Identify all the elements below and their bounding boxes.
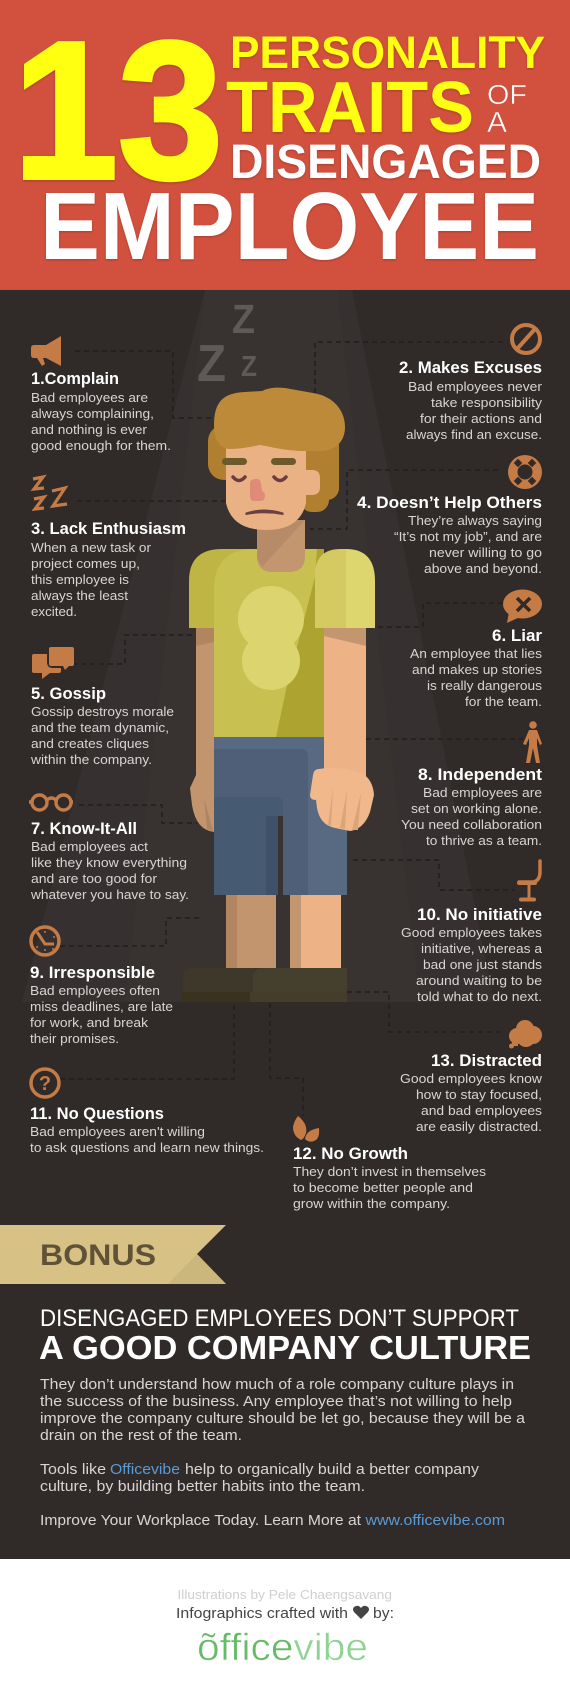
text: Gossip destroys morale <box>31 704 174 719</box>
text: this employee is <box>31 572 130 587</box>
heading: 1.Complain <box>31 370 119 388</box>
header banner <box>0 0 570 290</box>
bonus heading: DISENGAGED EMPLOYEES DON’T SUPPORT <box>40 1305 519 1332</box>
text <box>401 925 543 1004</box>
trait 8: independent <box>401 721 543 848</box>
shoes <box>181 968 347 1002</box>
back hair <box>208 425 339 512</box>
text: to ask questions and learn new things. <box>30 1140 264 1155</box>
text: Bad employees are <box>423 785 542 800</box>
text: and creates cliques <box>31 736 150 751</box>
trait 1: complain <box>31 336 171 453</box>
bonus label: BONUS <box>40 1239 156 1272</box>
bonus call to action: www.officevibe.com <box>364 1513 505 1529</box>
trait 10: no initiative <box>401 861 543 1004</box>
shirt <box>189 549 375 737</box>
text: You need collaboration <box>401 817 542 832</box>
closed eyes <box>233 477 286 480</box>
text: They don’t invest in themselves <box>293 1164 487 1179</box>
text: is really dangerous <box>427 678 543 693</box>
text: “It’s not my job”, and are <box>394 529 542 544</box>
trait 9: irresponsible <box>30 927 173 1046</box>
text: project comes up, <box>31 556 140 571</box>
heading: 7. Know-It-All <box>31 820 137 838</box>
text: Bad employees are <box>31 390 148 405</box>
heading: 8. Independent <box>418 766 543 784</box>
trait 12: no growth <box>293 1116 487 1211</box>
bonus paragraph 2: culture, by building better habits into the team. <box>40 1479 365 1495</box>
eyebrows <box>222 458 296 465</box>
chest stain <box>238 586 304 690</box>
bonus heading: A GOOD COMPANY CULTURE <box>39 1329 531 1366</box>
title: traits: TRAITS <box>226 68 474 148</box>
text: grow within the company. <box>293 1196 450 1211</box>
text: around waiting to be <box>416 973 542 988</box>
sleeping Z letters <box>197 296 257 393</box>
icon: question mark: ? <box>39 1073 51 1095</box>
text: above and beyond. <box>424 561 542 576</box>
text: and nothing is ever <box>31 422 148 437</box>
title: personality: PERSONALITY <box>230 27 545 78</box>
text: always the least <box>31 588 128 603</box>
text: and the team dynamic, <box>31 720 169 735</box>
text: miss deadlines, are late <box>30 999 173 1014</box>
icon: question mark <box>31 1069 59 1097</box>
text: whatever you have to say. <box>30 887 189 902</box>
nose <box>250 479 265 501</box>
heading: 2. Makes Excuses <box>399 359 542 377</box>
sleeping Z letters: Z <box>232 296 255 342</box>
icon: chair <box>517 861 540 902</box>
main hair <box>214 388 345 451</box>
heading: 10. No initiative <box>417 906 542 924</box>
crafted with line: by: <box>373 1606 394 1622</box>
character illustration <box>181 388 375 1002</box>
text: An employee that lies <box>410 646 543 661</box>
icon: zzz <box>33 477 67 509</box>
icon: standing person <box>523 721 542 763</box>
text: Good employees know <box>400 1071 543 1086</box>
text <box>406 379 543 442</box>
text: Bad employees never <box>408 379 543 394</box>
text: take responsibility <box>431 395 543 410</box>
text <box>401 785 542 848</box>
text: always complaining, <box>31 406 154 421</box>
bonus paragraph 1 <box>40 1377 526 1444</box>
crafted with line: Infographics crafted with <box>176 1606 348 1622</box>
heading: 12. No Growth <box>293 1145 408 1163</box>
text: Bad employees often <box>30 983 160 998</box>
text: never willing to go <box>429 545 542 560</box>
text: and are too good for <box>31 871 158 886</box>
title: a: A <box>487 107 508 139</box>
text: are easily distracted. <box>416 1119 542 1134</box>
bonus paragraph 1: drain on the rest of the team. <box>40 1428 242 1444</box>
trait 6: liar <box>410 590 543 709</box>
text: how to stay focused, <box>416 1087 542 1102</box>
footer <box>0 1559 570 1695</box>
bonus paragraph 2 <box>40 1462 480 1495</box>
icon: speech bubble with x <box>503 590 542 623</box>
heading: 3. Lack Enthusiasm <box>31 520 186 538</box>
illustrator credit: Illustrations by Pele Chaengsavang <box>178 1587 392 1602</box>
text <box>30 983 173 1046</box>
trait 11: no questions <box>30 1069 264 1155</box>
trait 3: lack enthusiasm <box>31 477 186 619</box>
text: When a new task or <box>31 540 152 555</box>
icon: glasses <box>29 795 73 810</box>
bonus ribbon <box>0 1225 226 1284</box>
title: 13: 13 <box>13 1 223 220</box>
trait 7: know-it-all <box>29 795 189 902</box>
officevibe logo: õfficevibe <box>197 1627 368 1669</box>
icon: clock <box>31 927 59 955</box>
heading: 13. Distracted <box>431 1052 542 1070</box>
title: disengaged: DISENGAGED <box>230 136 541 189</box>
icon: life ring <box>508 455 542 489</box>
bonus paragraph 1: improve the company culture should be let go, because they will be a <box>40 1411 526 1427</box>
dashed connector lines <box>60 342 523 1116</box>
mouth <box>246 510 283 514</box>
text <box>400 1071 543 1134</box>
trait 2: makes excuses <box>399 325 543 442</box>
icon: thought cloud <box>509 1020 542 1048</box>
shorts <box>214 737 347 895</box>
text: their promises. <box>30 1031 119 1046</box>
trait 4: doesn't help others <box>357 455 542 576</box>
bonus paragraph 1: the success of the business. Any employee that’s not willing to help <box>40 1394 512 1410</box>
text: Bad employees act <box>31 839 148 854</box>
sleeping Z letters: Z <box>197 335 226 393</box>
text: initiative, whereas a <box>421 941 543 956</box>
legs <box>226 895 341 968</box>
text <box>31 390 171 453</box>
text <box>31 540 152 619</box>
text: Good employees takes <box>401 925 543 940</box>
bonus paragraph 1: They don’t understand how much of a role company culture plays in <box>40 1377 514 1393</box>
text: excited. <box>31 604 77 619</box>
text: bad one just stands <box>423 957 543 972</box>
text: for the team. <box>465 694 542 709</box>
text <box>30 1124 264 1155</box>
bonus call to action: Improve Your Workplace Today. Learn More at <box>40 1513 361 1529</box>
trait 5: gossip <box>30 647 174 767</box>
text: Bad employees aren't willing <box>30 1124 205 1139</box>
title: employee: EMPLOYEE <box>40 173 539 280</box>
heading: 9. Irresponsible <box>30 964 155 982</box>
text: set on working alone. <box>411 801 542 816</box>
title: of: OF <box>487 79 527 110</box>
bonus paragraph 2: Officevibe <box>110 1462 180 1478</box>
bonus paragraph 2: Tools like <box>40 1462 106 1478</box>
heading: 6. Liar <box>492 627 543 645</box>
text <box>293 1164 487 1211</box>
text: for their actions and <box>420 411 542 426</box>
text: good enough for them. <box>31 438 171 453</box>
text <box>394 513 542 576</box>
text <box>410 646 543 709</box>
text: and bad employees <box>421 1103 543 1118</box>
icon: prohibited sign <box>512 325 540 353</box>
bonus paragraph 2: help to organically build a better company <box>185 1462 480 1478</box>
right hand <box>310 768 374 831</box>
right arm <box>324 628 366 778</box>
text: told what to do next. <box>417 989 542 1004</box>
text: and makes up stories <box>412 662 543 677</box>
text: to thrive as a team. <box>426 833 542 848</box>
text <box>30 839 189 902</box>
bonus call to action <box>40 1513 505 1529</box>
text: always find an excuse. <box>406 427 542 442</box>
text: They’re always saying <box>408 513 542 528</box>
spotlight beam <box>22 290 494 1002</box>
icon: chat bubbles <box>32 647 74 679</box>
text: to become better people and <box>293 1180 473 1195</box>
text: for work, and break <box>30 1015 149 1030</box>
icon: heart <box>353 1606 369 1619</box>
bonus heading <box>39 1305 531 1366</box>
sleeping Z letters: Z <box>241 351 257 383</box>
text: like they know everything <box>31 855 187 870</box>
text: within the company. <box>30 752 152 767</box>
neck <box>257 520 305 572</box>
left arm <box>190 628 214 832</box>
heading: 4. Doesn’t Help Others <box>357 494 542 512</box>
heading: 5. Gossip <box>31 685 106 703</box>
heading: 11. No Questions <box>30 1105 164 1123</box>
icon: megaphone <box>31 336 61 366</box>
trait 13: distracted <box>400 1020 543 1134</box>
text <box>30 704 174 767</box>
icon: leaves <box>293 1116 319 1142</box>
face <box>226 445 320 530</box>
